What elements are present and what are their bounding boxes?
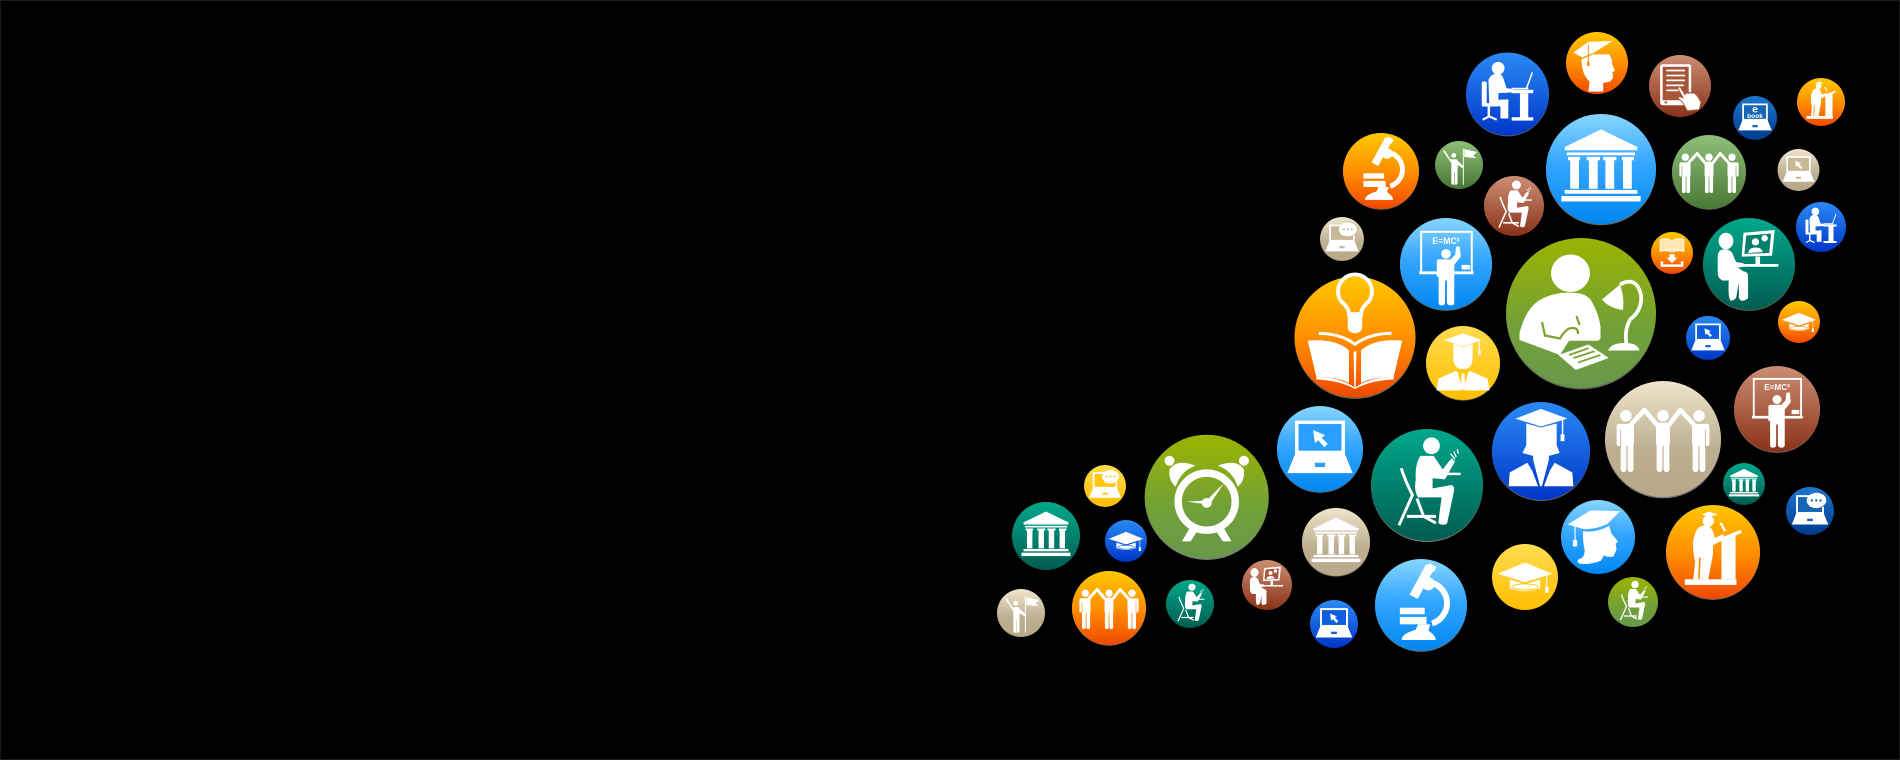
- icon: e-book laptop, navy: book: [1747, 113, 1763, 120]
- icon: alarm clock: [1145, 435, 1269, 560]
- icon: chat laptop, tan: [1320, 217, 1364, 261]
- icon: female graduate, deep blue: [1492, 402, 1590, 501]
- icon: video call, brown: [1242, 560, 1292, 610]
- icon: chat laptop, navy: [1786, 487, 1834, 535]
- icon: graduate head, orange: [1566, 32, 1628, 94]
- icon: graduation cap, yellow: [1492, 544, 1558, 610]
- icon: book download, orange: [1651, 232, 1693, 274]
- icon: flag person, tan: [997, 589, 1045, 637]
- icon: graduation cap, small orange: [1778, 301, 1820, 343]
- icon: microscope, orange: [1343, 133, 1419, 210]
- icon: laptop with cursor, small blue: [1686, 316, 1730, 360]
- icon: chat laptop, yellow: [1084, 465, 1126, 507]
- icon: e-book laptop, navy: e: [1752, 103, 1758, 115]
- icon: person at desk, small blue: [1796, 202, 1846, 252]
- icon: male graduate, yellow: [1426, 326, 1500, 401]
- icon: museum, light blue: [1546, 114, 1656, 225]
- icon: teacher at blackboard, light blue: [1400, 218, 1492, 311]
- icon: graduate at podium, orange: [1666, 505, 1760, 600]
- icon: linked people, tan: [1605, 381, 1721, 498]
- icon: book with light bulb, orange: [1294, 274, 1416, 399]
- icon: museum, teal: [1012, 502, 1080, 570]
- icon: tablet with hand, brown: [1649, 55, 1711, 117]
- icon: microscope, light blue: [1375, 559, 1467, 652]
- icon: graduation cap, blue: [1105, 520, 1147, 562]
- icon: linked people, orange: [1072, 571, 1146, 646]
- icon: flag person, green: [1435, 141, 1483, 189]
- icon: museum, tan: [1302, 508, 1370, 577]
- icon: person at desk with laptop, deep blue: [1466, 52, 1549, 136]
- icon: seated reader, olive: [1608, 577, 1658, 627]
- icon: video call, teal: [1703, 218, 1795, 311]
- icon: e-book laptop, navy: [1733, 96, 1777, 140]
- icon: laptop with cursor, light blue: [1277, 406, 1363, 493]
- icon: seated reader, teal: [1371, 429, 1483, 542]
- icon: linked people, green: [1672, 135, 1746, 210]
- icon: museum, small teal: [1723, 463, 1765, 505]
- icon: teacher at blackboard, light blue: E=MC²: [1432, 236, 1460, 246]
- icon: laptop with cursor, deep blue: [1310, 600, 1358, 648]
- icon: student studying under lamp, olive: [1506, 238, 1656, 390]
- icon: graduate girl profile, light blue: [1561, 500, 1635, 574]
- icon: laptop with cursor, tan: [1778, 149, 1820, 191]
- icon: podium, small orange: [1797, 78, 1845, 126]
- icon: teacher at blackboard, brown: [1734, 366, 1820, 453]
- icon: teacher at blackboard, brown: E=MC²: [1764, 383, 1790, 392]
- icon: seated reader, small teal: [1166, 580, 1214, 628]
- icon: seated reader, brown: [1484, 176, 1544, 236]
